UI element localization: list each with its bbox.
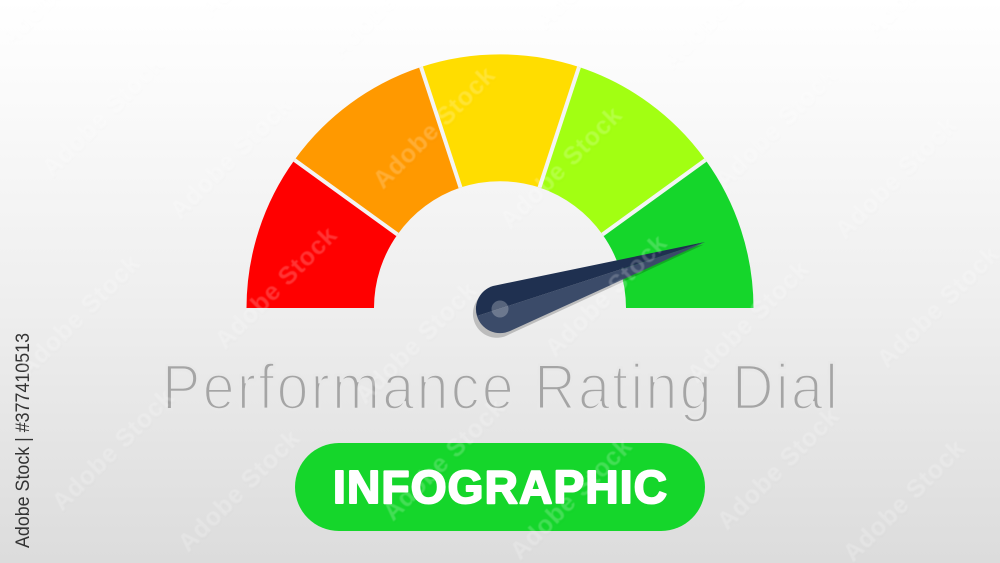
watermarks: Adobe Stock — [681, 255, 814, 388]
watermarks: Adobe Stock — [349, 276, 482, 409]
needle hub — [492, 300, 508, 318]
watermarks: Adobe Stock — [709, 61, 842, 194]
needle — [473, 242, 705, 338]
needle light half — [477, 242, 705, 333]
watermarks: Adobe Stock — [164, 91, 297, 224]
segment: red — [246, 160, 398, 308]
title: Performance Rating Dial — [162, 351, 838, 423]
watermarks: Adobe Stock — [209, 221, 342, 354]
watermarks: Adobe Stock — [46, 383, 179, 516]
badge — [295, 443, 705, 531]
segment: yellow — [421, 54, 579, 188]
needle shadow — [473, 244, 704, 338]
watermarks: Adobe Stock — [829, 111, 962, 244]
gauge dial — [246, 54, 754, 308]
watermarks: Adobe Stock — [377, 393, 510, 526]
segment: green — [602, 160, 754, 308]
watermarks: Adobe Stock — [711, 402, 844, 535]
watermarks: Adobe Stock — [539, 229, 672, 362]
stock id side label: Adobe Stock | #377410513 — [13, 333, 34, 548]
badge label: INFOGRAPHIC — [333, 461, 667, 513]
watermarks: Adobe Stock — [36, 49, 169, 182]
watermarks: Adobe Stock — [12, 249, 145, 382]
segment: lime — [540, 67, 706, 234]
badge pill — [295, 443, 705, 531]
segment: orange — [294, 67, 460, 234]
needle dark half — [476, 242, 705, 316]
watermarks: Adobe Stock — [494, 101, 627, 234]
watermarks: Adobe Stock — [367, 61, 500, 194]
watermarks: Adobe Stock — [504, 432, 637, 563]
watermarks: Adobe Stock — [172, 424, 305, 557]
